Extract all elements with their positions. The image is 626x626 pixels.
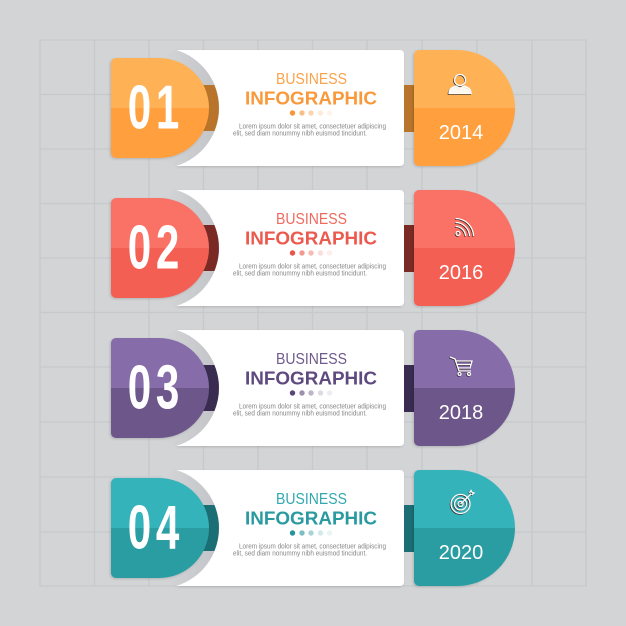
year 2016: 2016	[439, 262, 483, 284]
icon: target	[450, 490, 474, 514]
panel: row 4 2020	[111, 470, 515, 586]
number 04: 04	[128, 494, 184, 563]
year tab 1	[414, 50, 515, 166]
crescent 1	[160, 50, 219, 166]
panel: row 1 2014	[111, 50, 515, 166]
connector 2 left	[200, 225, 219, 271]
connector 1 left	[200, 85, 219, 131]
body text 4	[233, 542, 386, 558]
year 2018: 2018	[439, 402, 483, 424]
icon: cart	[449, 357, 472, 376]
title 1: INFOGRAPHIC	[245, 88, 377, 108]
heading 4: BUSINESS	[276, 491, 347, 508]
title 4: INFOGRAPHIC	[245, 508, 377, 528]
panel: row 3 2018	[111, 330, 515, 446]
dots 4	[290, 530, 332, 536]
crescent 4	[160, 470, 219, 586]
dots 3	[290, 390, 332, 396]
year 2020: 2020	[439, 542, 483, 564]
number tab 1	[111, 58, 209, 158]
number tab 3	[111, 338, 209, 438]
connector 1 right	[404, 85, 415, 132]
year tab 4	[414, 470, 515, 586]
crescent 2	[160, 190, 219, 306]
body text 3	[233, 402, 386, 418]
body text 1: Lorem ipsum dolor sit amet, consectetuer adipiscing	[239, 122, 386, 130]
dots 1	[290, 110, 332, 116]
year tab 2	[414, 190, 515, 306]
icon: person	[448, 74, 471, 94]
icon: rss	[455, 218, 474, 237]
number tab 2	[111, 198, 209, 298]
body text 1: elit, sed diam nonummy nibh euismod tincidunt.	[233, 128, 367, 138]
card 4	[176, 470, 404, 586]
connector 4 left	[200, 505, 219, 551]
card 3	[176, 330, 404, 446]
title 2: INFOGRAPHIC	[245, 228, 377, 248]
year 2014: 2014	[439, 122, 483, 144]
body text 3: elit, sed diam nonummy nibh euismod tincidunt.	[233, 408, 367, 418]
connector 4 right	[404, 505, 415, 552]
panel: row 2 2016	[111, 190, 515, 306]
body text 2	[233, 262, 386, 278]
dots 2	[290, 250, 332, 256]
number 01: 01	[128, 74, 184, 143]
body text 4: Lorem ipsum dolor sit amet, consectetuer adipiscing	[239, 542, 386, 550]
connector 3 right	[404, 365, 415, 412]
heading 3: BUSINESS	[276, 351, 347, 368]
year tab 3	[414, 330, 515, 446]
body text 4: elit, sed diam nonummy nibh euismod tincidunt.	[233, 548, 367, 558]
card 1	[176, 50, 404, 166]
title 3: INFOGRAPHIC	[245, 368, 377, 388]
connector 3 left	[200, 365, 219, 411]
number 03: 03	[128, 354, 184, 423]
number 02: 02	[128, 214, 184, 283]
connector 2 right	[404, 225, 415, 272]
crescent 3	[160, 330, 219, 446]
body text 1	[233, 122, 386, 138]
card 2	[176, 190, 404, 306]
body text 2: Lorem ipsum dolor sit amet, consectetuer adipiscing	[239, 262, 386, 270]
body text 3: Lorem ipsum dolor sit amet, consectetuer adipiscing	[239, 402, 386, 410]
heading 2: BUSINESS	[276, 211, 347, 228]
body text 2: elit, sed diam nonummy nibh euismod tincidunt.	[233, 268, 367, 278]
number tab 4	[111, 478, 209, 578]
heading 1: BUSINESS	[276, 71, 347, 88]
